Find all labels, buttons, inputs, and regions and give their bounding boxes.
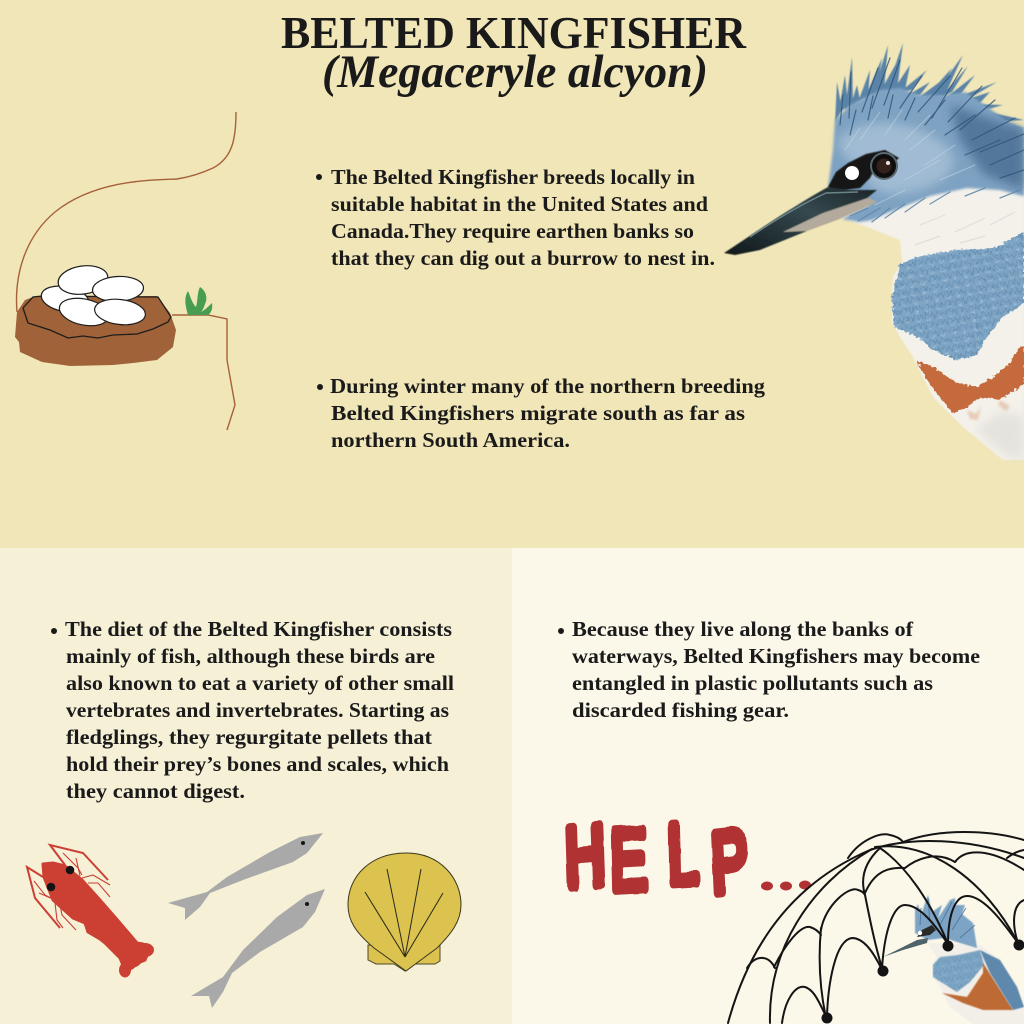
collar feather shading [915, 212, 1015, 245]
nest rim [23, 296, 171, 338]
lower bill pale edge [783, 197, 877, 232]
text block: diet: they cannot digest. [66, 779, 245, 803]
eye [870, 152, 898, 180]
text block: diet: mainly of fish, although these birds are [66, 644, 435, 668]
icon: red shrimp [27, 845, 154, 978]
cheek fringe strokes [850, 188, 1020, 222]
text block: breeding: suitable habitat in the United States and [331, 192, 708, 216]
ground ledge [172, 315, 235, 430]
small bird breast [933, 950, 984, 992]
shrimp legs [34, 853, 110, 930]
burrow outline [17, 112, 236, 312]
title: (Megaceryle alcyon) [322, 46, 708, 98]
text block: migration: Belted Kingfishers migrate south as far as [331, 401, 745, 425]
icon: yellow scallop shell [348, 853, 461, 971]
head dark nape [950, 105, 1024, 190]
text block: diet: fledglings, they regurgitate pellets that [66, 725, 432, 749]
small bird rust band [942, 963, 1013, 1010]
icon: lower fish [191, 889, 325, 1008]
text block: migration: northern South America. [331, 428, 570, 452]
panel: pollution section [512, 548, 1024, 1024]
blue breast [892, 232, 1024, 360]
icon: grass tuft [185, 287, 212, 315]
text block: diet: The diet of the Belted Kingfisher consists [65, 617, 452, 641]
panel: diet section [0, 548, 512, 1024]
bill highlight [750, 192, 858, 237]
text block: pollution: Because they live along the banks of [572, 617, 914, 641]
small bird face mask and eye [917, 925, 936, 937]
net knots [822, 940, 1024, 1024]
rust flecks on belly [967, 400, 1010, 420]
small bird wing [980, 950, 1024, 1010]
text block: migration: During winter many of the northern breeding [330, 374, 766, 398]
text block: breeding: that they can dig out a burrow to nest in. [331, 246, 715, 270]
text block: breeding: The Belted Kingfisher breeds locally in [331, 165, 695, 189]
panel: top habitat section [0, 0, 1024, 548]
shrimp antennae [27, 845, 108, 928]
illustration: kingfisher portrait [724, 43, 1024, 460]
text block: pollution [558, 617, 980, 722]
eggs [39, 263, 147, 330]
illustration: fishing net [728, 832, 1024, 1024]
bill [724, 187, 877, 255]
text block: pollution: waterways, Belted Kingfishers may become [572, 644, 980, 668]
shrimp tail lobes [119, 943, 154, 978]
handwritten help text: HELP [563, 806, 750, 912]
nest [15, 296, 176, 366]
lore black mask [828, 150, 899, 191]
small bird crest dark streaks [920, 898, 975, 938]
text block: diet [51, 617, 454, 803]
white loral spot [845, 166, 859, 180]
small bird crest [915, 895, 977, 948]
text block: pollution: discarded fishing gear. [572, 698, 789, 722]
ellipsis dots [761, 880, 811, 890]
head [828, 88, 1024, 222]
text block: breeding: Canada.They require earthen banks so [331, 219, 694, 243]
rust band [916, 347, 1024, 413]
belly shading [975, 412, 1024, 458]
pale feather strokes [845, 110, 975, 205]
bird body base [840, 180, 1024, 460]
small bird bill [883, 938, 928, 957]
illustration: small kingfisher caught in net [883, 895, 1024, 1024]
text block: breeding [316, 165, 715, 270]
crest feather strokes [840, 58, 1024, 178]
text block: migration [317, 374, 766, 452]
crest spikes [835, 43, 1024, 128]
text block: diet: vertebrates and invertebrates. Starting as [66, 698, 449, 722]
illustration: burrow with nest and eggs [15, 112, 236, 430]
icon: upper fish [168, 833, 323, 920]
title: BELTED KINGFISHER [281, 7, 747, 58]
title [281, 7, 747, 98]
text block: diet: hold their prey’s bones and scales, which [66, 752, 449, 776]
text block: pollution: entangled in plastic pollutants such as [572, 671, 933, 695]
head light crown and face [838, 123, 953, 194]
small bird body [927, 943, 1024, 1024]
text block: diet: also known to eat a variety of other small [66, 671, 454, 695]
